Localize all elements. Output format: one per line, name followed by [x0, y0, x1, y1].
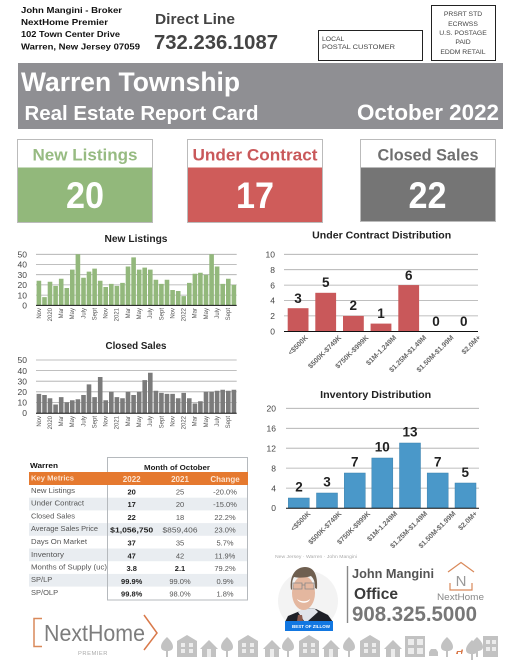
chart: inventory distribution: 13: [402, 425, 418, 440]
chart: closed sales: 2021: [115, 415, 121, 429]
row: under contract: -15.0%: [213, 500, 237, 509]
metrics table: 2022: [123, 475, 141, 484]
chart: new listings: May: [137, 308, 143, 319]
chart: new listings: July: [81, 308, 87, 319]
chart: new listings: May: [204, 308, 210, 319]
chart: closed sales: Nov: [104, 416, 110, 427]
postage indicia: ECRWSS: [448, 21, 478, 28]
postage indicia: PAID: [455, 39, 471, 46]
chart: under contract distribution: 4: [270, 296, 275, 306]
row: closed sales: Closed Sales: [31, 512, 75, 520]
row: months of supply: 3.8: [126, 564, 137, 573]
row: new listings: [31, 486, 237, 496]
chart: closed sales: Sept: [159, 416, 165, 428]
chart: closed sales: 50: [18, 355, 27, 365]
neighborhood icon strip: [161, 635, 498, 660]
row: days on market: [31, 537, 234, 548]
chart: new listings: 2020: [48, 307, 54, 321]
chart: new listings: Nov: [37, 308, 43, 319]
title banner: [18, 63, 503, 129]
chart: under contract distribution: 0: [460, 314, 467, 329]
chart: new listings: July: [148, 308, 154, 319]
nexthome logo small: [437, 562, 484, 603]
chart: under contract distribution: $1M-1.249M: [365, 334, 398, 367]
chart: closed sales: July: [148, 416, 154, 427]
chart: inventory distribution: 12: [267, 443, 276, 453]
row: sp/olp: 99.8%: [121, 590, 143, 598]
row: average sales price: $859,406: [162, 526, 198, 534]
chart: new listings: 2022: [182, 307, 188, 321]
postage indicia: PRSRT STD: [444, 11, 482, 18]
row: sp/lp: 0.9%: [216, 577, 234, 586]
chart: under contract distribution: $500K-$749K: [307, 334, 343, 370]
best of zillow badge: [285, 621, 333, 631]
sender address: NextHome Premier: [21, 17, 109, 27]
row: days on market: Days On Market: [31, 537, 88, 546]
row: months of supply: [31, 562, 236, 573]
agent contact block: [348, 566, 477, 626]
chart: under contract distribution: 3: [294, 291, 302, 306]
chart: under contract distribution: 5: [322, 275, 330, 290]
row: closed sales: 22.2%: [214, 513, 236, 522]
metrics table: [29, 458, 248, 600]
row: sp/lp: 99.9%: [121, 577, 143, 586]
chart: new listings: [18, 234, 237, 321]
row: average sales price: 23.0%: [214, 526, 236, 534]
chart: inventory distribution: 7: [434, 455, 441, 470]
chart: new listings: Mar: [193, 308, 199, 318]
row: closed sales: [31, 512, 236, 522]
chart: closed sales: 10: [18, 398, 27, 408]
row: sp/lp: SP/LP: [31, 575, 52, 584]
metrics table: Key Metrics: [31, 474, 74, 482]
agent tagline: New Jersey · Warren · John Mangini: [275, 554, 357, 559]
chart: under contract distribution: $1.25M-$1.49M: [388, 334, 428, 374]
chart: closed sales: 20: [18, 387, 27, 397]
card: new listings: [18, 140, 152, 222]
chart: new listings: 2021: [115, 307, 121, 321]
sender address: Warren, New Jersey 07059: [21, 42, 140, 52]
card: closed sales: Closed Sales: [378, 146, 478, 164]
chart: new listings: Nov: [170, 308, 176, 319]
chart: under contract distribution: <$500K: [287, 334, 310, 357]
row: new listings: 20: [128, 488, 136, 496]
chart: under contract distribution: 1: [377, 306, 385, 321]
row: months of supply: 79.2%: [214, 564, 236, 573]
row: months of supply: 2.1: [175, 564, 185, 573]
chart: new listings: Sept: [159, 308, 165, 320]
chart: under contract distribution: 0: [270, 326, 275, 336]
metrics table: 2021: [171, 475, 189, 484]
chart: closed sales: 40: [18, 366, 27, 376]
chart: inventory distribution: 5: [462, 465, 470, 480]
row: inventory: Inventory: [31, 550, 64, 559]
agent contact block: Office: [354, 586, 398, 603]
direct line phone: 732.236.1087: [154, 31, 278, 54]
row: closed sales: 18: [176, 513, 184, 522]
chart: new listings: 40: [18, 260, 27, 270]
chart: under contract distribution: 2: [350, 298, 357, 313]
chart: closed sales: Mar: [193, 416, 199, 426]
card: under contract: Under Contract: [192, 146, 318, 164]
chart: under contract distribution: 10: [266, 250, 275, 260]
chart: closed sales: Mar: [59, 416, 65, 426]
row: inventory: 47: [128, 552, 136, 560]
chart: inventory distribution: $1.50M-$1.99M: [418, 510, 458, 550]
agent photo: [278, 567, 338, 631]
sender address: [21, 5, 140, 52]
chart: new listings: 10: [18, 290, 27, 300]
row: days on market: 5.7%: [216, 538, 234, 548]
chart: closed sales: 0: [22, 408, 27, 418]
nexthome premier logo: PREMIER: [78, 651, 108, 657]
postal customer box: [318, 30, 422, 60]
sender address: 102 Town Center Drive: [21, 29, 120, 39]
chart: inventory distribution: 4: [271, 483, 276, 493]
chart: inventory distribution: 0: [271, 503, 276, 513]
chart: inventory distribution: 2: [295, 480, 303, 495]
postage indicia: [432, 6, 496, 60]
chart: closed sales: Nov: [37, 416, 43, 427]
row: under contract: 17: [128, 500, 136, 509]
metrics table: Warren: [30, 461, 58, 470]
chart: closed sales: Sept: [92, 416, 98, 428]
nexthome logo small: N: [456, 573, 466, 590]
chart: new listings: Mar: [126, 308, 132, 318]
row: inventory: 11.9%: [215, 552, 236, 560]
chart: inventory distribution: $1.25M-$1.49M: [389, 510, 429, 550]
row: days on market: 37: [128, 538, 136, 548]
row: average sales price: Average Sales Price: [31, 524, 98, 533]
row: sp/lp: 99.0%: [169, 577, 191, 586]
row: average sales price: [31, 524, 236, 534]
card: new listings: New Listings: [32, 146, 138, 164]
chart: under contract distribution: 2: [270, 311, 275, 321]
chart: new listings: Sept: [92, 308, 98, 320]
title banner: Real Estate Report Card: [24, 103, 258, 125]
chart: inventory distribution: 16: [267, 424, 276, 434]
row: inventory: [31, 550, 236, 560]
chart: under contract distribution: 6: [270, 280, 275, 290]
chart: under contract distribution: 6: [405, 268, 413, 283]
chart: new listings: 50: [18, 250, 27, 260]
row: new listings: -20.0%: [213, 488, 237, 496]
direct line phone: Direct Line: [155, 11, 235, 28]
row: new listings: 25: [176, 488, 184, 496]
chart: inventory distribution: Inventory Distribution: [320, 390, 431, 401]
chart: new listings: July: [215, 308, 221, 319]
row: under contract: Under Contract: [31, 498, 85, 508]
chart: new listings: Sept: [226, 308, 232, 320]
best of zillow badge: BEST OF ZILLOW: [292, 624, 331, 629]
chart: under contract distribution: [266, 230, 482, 374]
title banner: Warren Township: [21, 67, 240, 97]
chart: inventory distribution: 7: [351, 455, 358, 470]
row: sp/lp: [31, 575, 234, 586]
chart: inventory distribution: 10: [375, 440, 390, 455]
nexthome logo small: NextHome: [437, 592, 484, 603]
chart: under contract distribution: Under Contract Distribution: [312, 230, 451, 242]
chart: closed sales: Nov: [170, 416, 176, 427]
metrics table: Change: [210, 475, 240, 484]
chart: closed sales: [18, 341, 237, 429]
sender address: John Mangini - Broker: [21, 5, 123, 15]
row: inventory: 42: [176, 552, 184, 560]
chart: under contract distribution: $750K-$999K: [335, 334, 370, 370]
agent contact block: John Mangini: [352, 566, 434, 581]
chart: inventory distribution: $750K-$999K: [336, 510, 372, 546]
row: sp/olp: SP/OLP: [31, 588, 58, 597]
direct line phone: [154, 11, 278, 54]
card: under contract: [188, 140, 322, 222]
row: months of supply: Months of Supply (uc): [31, 562, 108, 572]
postal customer box: POSTAL CUSTOMER: [322, 44, 395, 51]
row: sp/olp: 1.8%: [216, 590, 234, 598]
postage indicia: U.S. POSTAGE: [439, 30, 487, 37]
chart: closed sales: May: [70, 416, 76, 427]
row: under contract: [31, 498, 237, 509]
title banner: October 2022: [357, 100, 499, 125]
row: sp/olp: [31, 588, 234, 598]
chart: inventory distribution: <$500K: [290, 510, 312, 533]
chart: closed sales: Mar: [126, 416, 132, 426]
row: under contract: 20: [176, 500, 184, 509]
chart: new listings: 0: [22, 300, 27, 310]
metrics table: Month of October: [144, 463, 210, 472]
chart: under contract distribution: 0: [432, 314, 440, 329]
chart: new listings: Mar: [59, 308, 65, 318]
chart: new listings: May: [70, 308, 76, 319]
chart: under contract distribution: $1.50M-$1.99M: [416, 334, 456, 374]
nexthome premier logo: [34, 615, 157, 657]
row: average sales price: $1,056,750: [110, 526, 153, 534]
card: under contract: 17: [236, 175, 274, 216]
chart: closed sales: May: [137, 416, 143, 427]
nexthome premier logo: NextHome: [44, 620, 145, 646]
row: closed sales: 22: [128, 513, 136, 522]
chart: inventory distribution: 8: [271, 463, 276, 473]
chart: closed sales: May: [204, 416, 210, 427]
postage indicia: EDDM RETAIL: [440, 49, 486, 56]
chart: under contract distribution: 8: [270, 265, 275, 275]
card: closed sales: 22: [408, 175, 446, 216]
chart: inventory distribution: $1M-1.249M: [366, 510, 399, 543]
row: days on market: 35: [176, 538, 184, 548]
chart: new listings: 30: [18, 270, 27, 280]
chart: inventory distribution: 20: [267, 404, 276, 414]
chart: closed sales: Sept: [226, 416, 232, 428]
chart: inventory distribution: $2.0M+: [458, 510, 479, 532]
chart: closed sales: July: [81, 416, 87, 427]
chart: closed sales: 2022: [182, 415, 188, 429]
chart: closed sales: 2020: [48, 415, 54, 429]
row: new listings: New Listings: [31, 486, 75, 495]
chart: new listings: Nov: [104, 308, 110, 319]
chart: inventory distribution: [267, 390, 479, 550]
chart: new listings: New Listings: [104, 234, 168, 245]
row: sp/olp: 98.0%: [169, 590, 191, 598]
card: closed sales: [360, 140, 496, 222]
chart: inventory distribution: $500K-$749K: [308, 510, 343, 546]
chart: under contract distribution: $2.0M+: [461, 334, 482, 356]
chart: closed sales: July: [215, 416, 221, 427]
card: new listings: 20: [66, 175, 104, 216]
chart: new listings: 20: [18, 280, 27, 290]
chart: closed sales: Closed Sales: [106, 341, 167, 352]
postal customer box: LOCAL: [322, 36, 345, 43]
chart: closed sales: 30: [18, 376, 27, 386]
chart: inventory distribution: 3: [323, 475, 331, 490]
agent contact block: 908.325.5000: [352, 603, 477, 626]
